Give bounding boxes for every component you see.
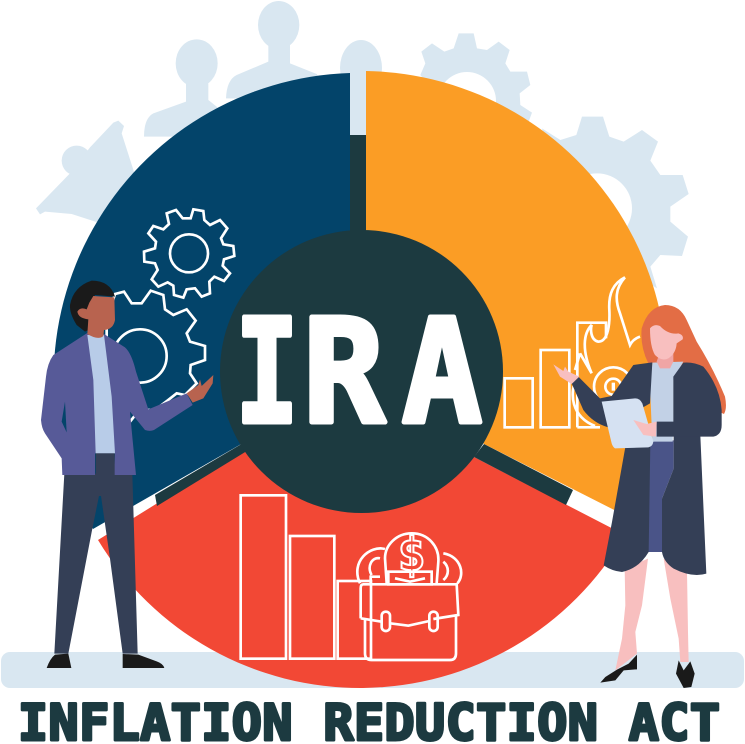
icon: briefcase with coins xyxy=(357,529,461,660)
figure: woman xyxy=(553,305,726,688)
briefcase latches xyxy=(382,612,438,631)
icon: small gear xyxy=(144,209,234,298)
hair xyxy=(641,305,726,414)
silhouette: person back xyxy=(226,1,333,100)
icon: rising bars with flame and coin xyxy=(505,277,640,427)
wheel segment: orange xyxy=(366,71,667,519)
coat upper and arms xyxy=(572,362,722,437)
tablet xyxy=(602,398,653,448)
silhouette: large gear xyxy=(542,117,689,288)
icon: gears xyxy=(107,209,234,422)
jacket xyxy=(41,333,193,475)
shoes xyxy=(47,654,164,668)
wheel segment: red xyxy=(98,380,625,688)
heading: IRA: A xyxy=(402,288,482,456)
heading: IRA xyxy=(235,288,482,457)
flame xyxy=(575,277,640,373)
background silhouettes xyxy=(36,1,689,288)
silhouette: person right xyxy=(340,40,382,135)
icon: falling bars xyxy=(241,495,371,659)
icon: large gear xyxy=(107,291,205,422)
head and hand xyxy=(70,281,213,403)
coins: $ xyxy=(398,529,426,583)
shirt xyxy=(650,353,683,442)
floor bar xyxy=(1,652,744,688)
bars xyxy=(505,323,606,427)
heading: IRA: R xyxy=(303,290,386,457)
heading: IRA: I xyxy=(235,288,299,456)
figure: man xyxy=(41,281,213,668)
silhouette: megaphone xyxy=(36,121,135,223)
wheel segment: blue xyxy=(54,73,350,529)
trousers xyxy=(54,474,138,654)
centre circle xyxy=(220,230,503,513)
hands xyxy=(553,364,657,437)
briefcase xyxy=(361,584,458,660)
wheel xyxy=(54,71,667,688)
coat lower xyxy=(604,435,706,575)
silhouette: person left xyxy=(144,39,233,137)
face xyxy=(650,325,683,359)
legs xyxy=(615,559,689,670)
shoes xyxy=(600,655,695,688)
silhouette: small gear xyxy=(420,33,532,133)
coin xyxy=(573,367,633,426)
skirt xyxy=(648,440,674,552)
separator strips xyxy=(155,135,573,506)
